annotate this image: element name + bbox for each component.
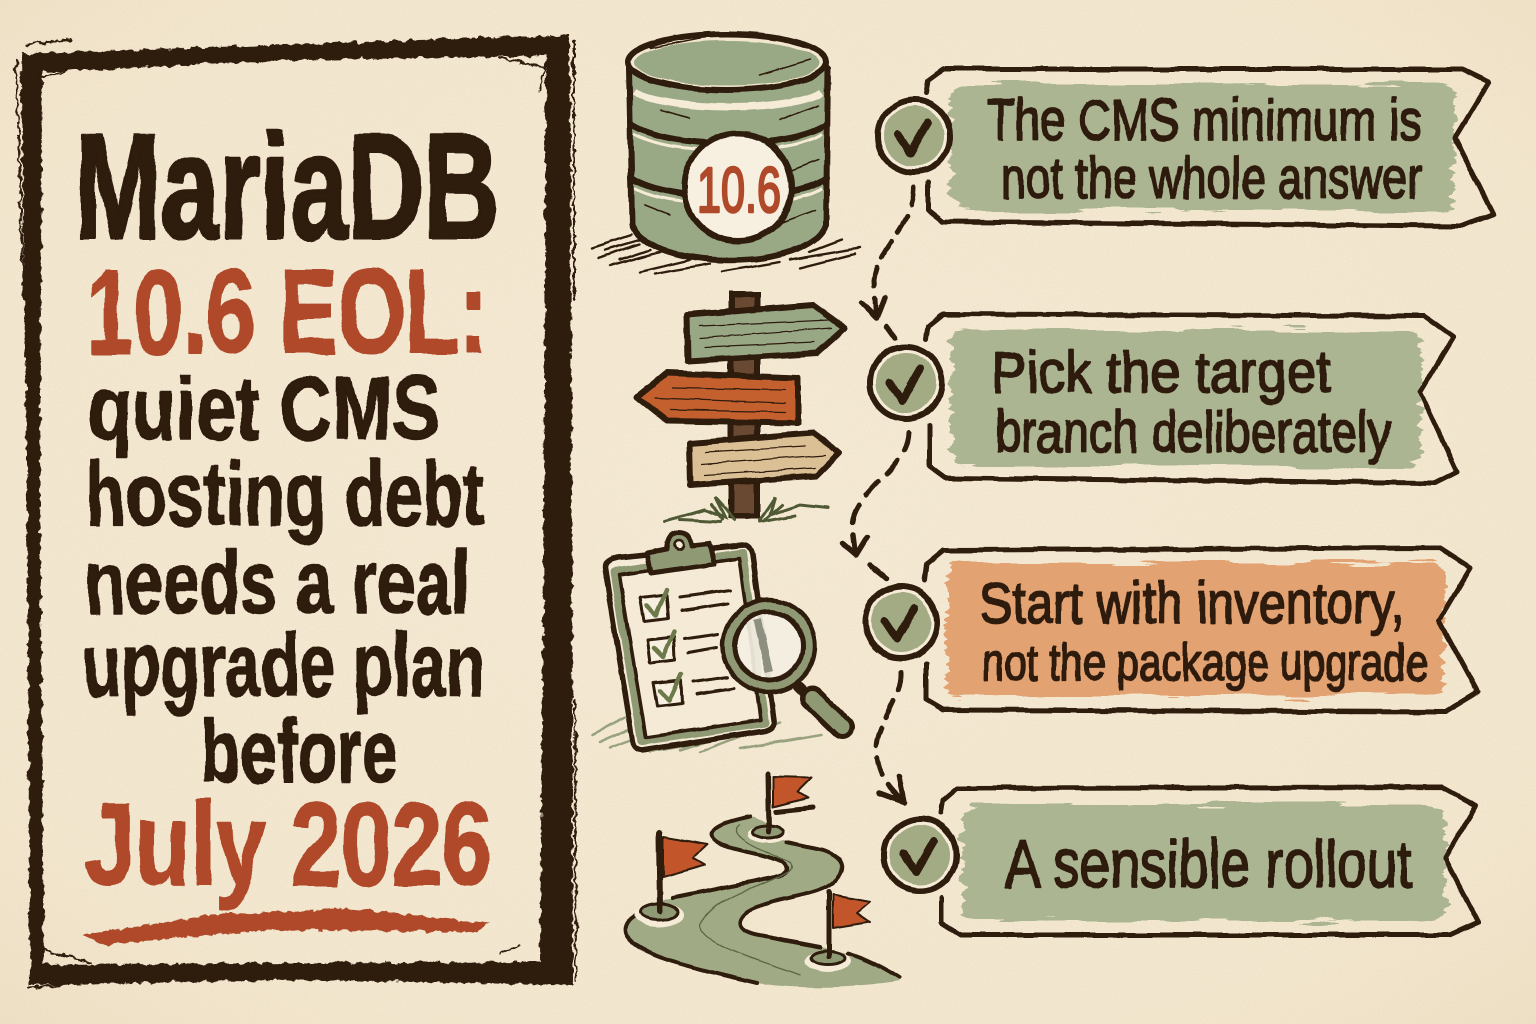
step 2 banner — [926, 314, 1457, 483]
sign: green — [687, 305, 845, 361]
step text — [991, 340, 1391, 465]
title line: quiet CMS: quiet CMS — [88, 359, 440, 459]
step 2 check — [870, 347, 942, 419]
icon: winding road with flags — [625, 774, 900, 987]
flag right — [805, 892, 870, 972]
step text: Pick the target — [991, 340, 1331, 405]
magnifying glass — [723, 600, 842, 727]
sign: orange — [637, 373, 798, 423]
clipboard board — [605, 545, 774, 750]
banner outline — [926, 69, 1493, 226]
brush fill — [950, 84, 1455, 210]
sign: tan — [689, 433, 840, 485]
title line: needs a real: needs a real — [85, 533, 470, 633]
step 1 banner — [926, 69, 1493, 226]
road — [625, 817, 900, 987]
banner outline — [941, 787, 1478, 935]
dashed arrow 1 — [862, 187, 914, 338]
step text: Start with inventory, — [980, 571, 1404, 636]
step text: A sensible rollout — [1005, 826, 1412, 902]
icon: clipboard with magnifier — [592, 533, 842, 752]
banner outline — [924, 548, 1478, 712]
step 4 banner — [941, 787, 1478, 935]
panel: title frame — [16, 35, 576, 988]
flag left — [634, 833, 707, 927]
title text — [74, 102, 499, 911]
step text: The CMS minimum is — [987, 88, 1422, 153]
database version badge: 10.6 — [697, 154, 781, 226]
step 3 banner — [924, 548, 1478, 712]
dashed arrow 2 — [843, 432, 908, 578]
title line: upgrade plan: upgrade plan — [82, 616, 485, 716]
step text: not the whole answer — [1001, 146, 1422, 211]
flag top — [748, 774, 812, 843]
step 4 check — [884, 819, 956, 891]
step text — [980, 571, 1428, 692]
brush fill — [947, 563, 1444, 696]
step 1 check — [878, 100, 950, 172]
title line: MariaDB: MariaDB — [74, 102, 499, 270]
step text: branch deliberately — [995, 400, 1391, 465]
title line: hosting debt: hosting debt — [85, 445, 485, 545]
brush fill — [951, 330, 1421, 466]
icon: signpost — [637, 294, 845, 522]
banner outline — [926, 314, 1457, 483]
dashed arrow 3 — [876, 672, 904, 802]
checklist — [640, 590, 733, 706]
brush underline — [82, 908, 490, 945]
step 3 check — [865, 586, 937, 658]
title line: before: before — [201, 702, 398, 802]
brush fill — [962, 804, 1445, 921]
clipboard clip — [647, 533, 714, 573]
icon: database cylinder — [592, 34, 860, 274]
title line: 10.6 EOL: 10.6 EOL: — [85, 245, 488, 379]
step text — [987, 88, 1422, 211]
title line: July 2026: July 2026 — [85, 779, 492, 911]
